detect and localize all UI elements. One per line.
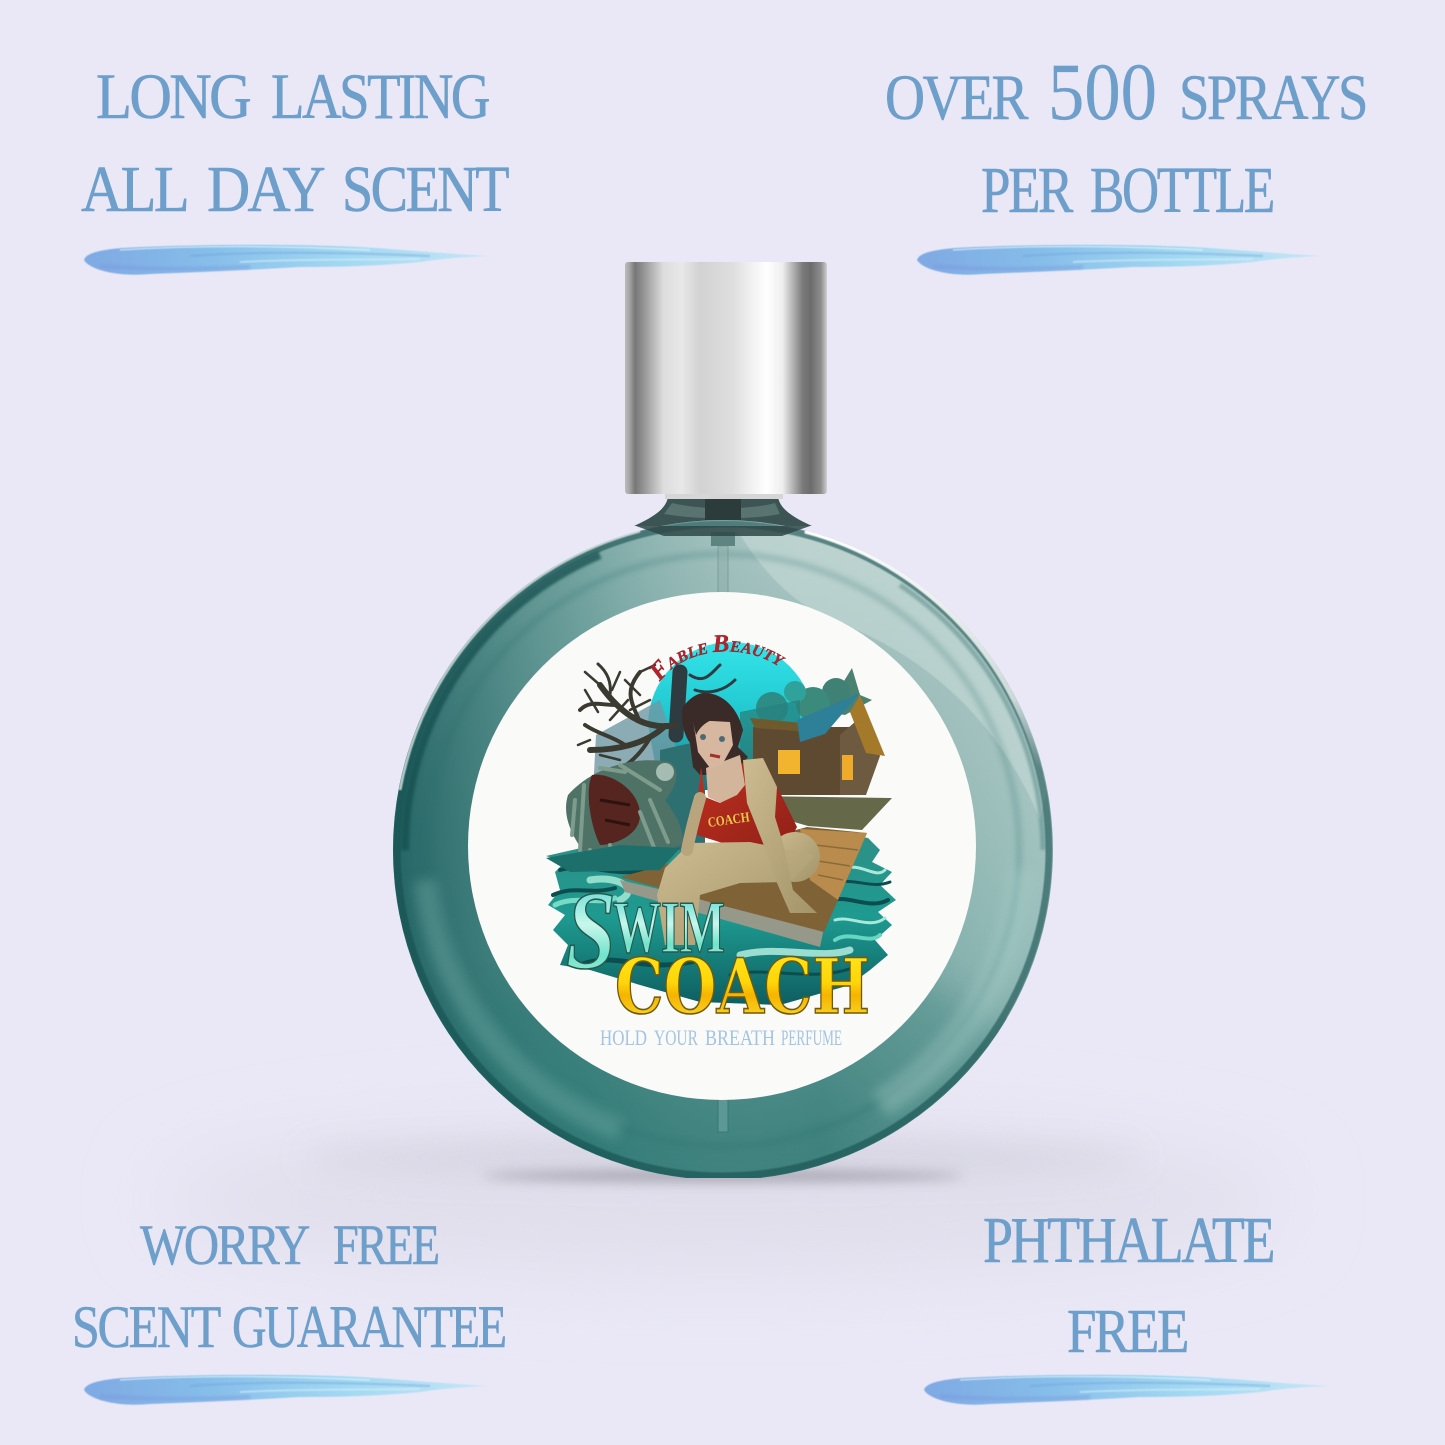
- callout: over 500 sprays: [885, 46, 1366, 227]
- product name: swim: [566, 869, 725, 993]
- brush stroke: bottom right: [924, 1375, 1330, 1405]
- water ripples: [553, 867, 890, 975]
- product name: swim: WIM: [613, 887, 725, 969]
- callout: long lasting: [81, 61, 509, 226]
- product name: coach: COACH: [615, 942, 870, 1031]
- callout: worry free: WORRY: [140, 1214, 309, 1277]
- product name: swim: S: [566, 869, 616, 993]
- callout: long lasting: SCENT: [342, 153, 509, 226]
- illustration: swim coach artwork: [546, 635, 896, 1050]
- distant forest: [590, 668, 872, 860]
- chest: [706, 755, 745, 803]
- swimsuit: [697, 758, 797, 850]
- glowing cabin windows: [778, 750, 800, 774]
- round label: [468, 592, 976, 1100]
- callout: phthalate free: [983, 1204, 1274, 1366]
- bottle neck: [634, 494, 812, 526]
- tagline: YOUR: [654, 1025, 698, 1050]
- moon: [648, 642, 814, 790]
- bottle glass body: [393, 520, 1070, 1184]
- water: [546, 830, 896, 1005]
- glass highlight: [741, 524, 1048, 818]
- bottle shoulder collar: [636, 526, 810, 536]
- callout: long lasting: ALL: [81, 153, 187, 226]
- callout: long lasting: DAY: [207, 153, 324, 226]
- perfume bottle: [393, 262, 1070, 1184]
- callout: long lasting: LASTING: [271, 61, 489, 133]
- dispenser tube: [711, 532, 735, 1132]
- brand arc title: FABLE BEAUTY: [649, 635, 786, 682]
- tagline: BREATH: [705, 1025, 775, 1050]
- callout: worry free: FREE: [333, 1214, 438, 1277]
- tagline: HOLD: [600, 1025, 647, 1050]
- tagline: [600, 1025, 842, 1050]
- callout: worry free: GUARANTEE: [232, 1294, 505, 1360]
- face: [693, 720, 733, 768]
- callout: over 500 sprays: OVER: [885, 62, 1029, 134]
- swamp tree: [578, 664, 735, 775]
- swimsuit lettering: COACH: [707, 810, 751, 831]
- callout: long lasting: LONG: [96, 61, 250, 133]
- callout: worry free: [72, 1214, 505, 1360]
- callout: over 500 sprays: BOTTLE: [1090, 154, 1273, 227]
- callout: worry free: SCENT: [72, 1294, 221, 1360]
- swamp monster: [546, 760, 683, 872]
- thigh and legs: [657, 832, 820, 945]
- callout: over 500 sprays: PER: [981, 154, 1073, 227]
- brush stroke: bottom left: [84, 1375, 490, 1405]
- callout: phthalate free: PHTHALATE: [983, 1204, 1274, 1277]
- callout: over 500 sprays: 500: [1048, 46, 1157, 137]
- tagline: PERFUME: [781, 1025, 842, 1050]
- hair: [682, 693, 748, 775]
- cabin: [750, 693, 892, 830]
- woman in lifeguard swimsuit: [657, 693, 820, 945]
- callout: over 500 sprays: SPRAYS: [1179, 62, 1366, 134]
- dock: [620, 827, 867, 947]
- brush stroke: top left: [84, 245, 490, 275]
- arms: [743, 758, 817, 913]
- brush stroke: top right: [917, 245, 1323, 275]
- callout: phthalate free: FREE: [1067, 1298, 1187, 1366]
- silver cap: [625, 262, 827, 494]
- floor shadow: [163, 1130, 1283, 1270]
